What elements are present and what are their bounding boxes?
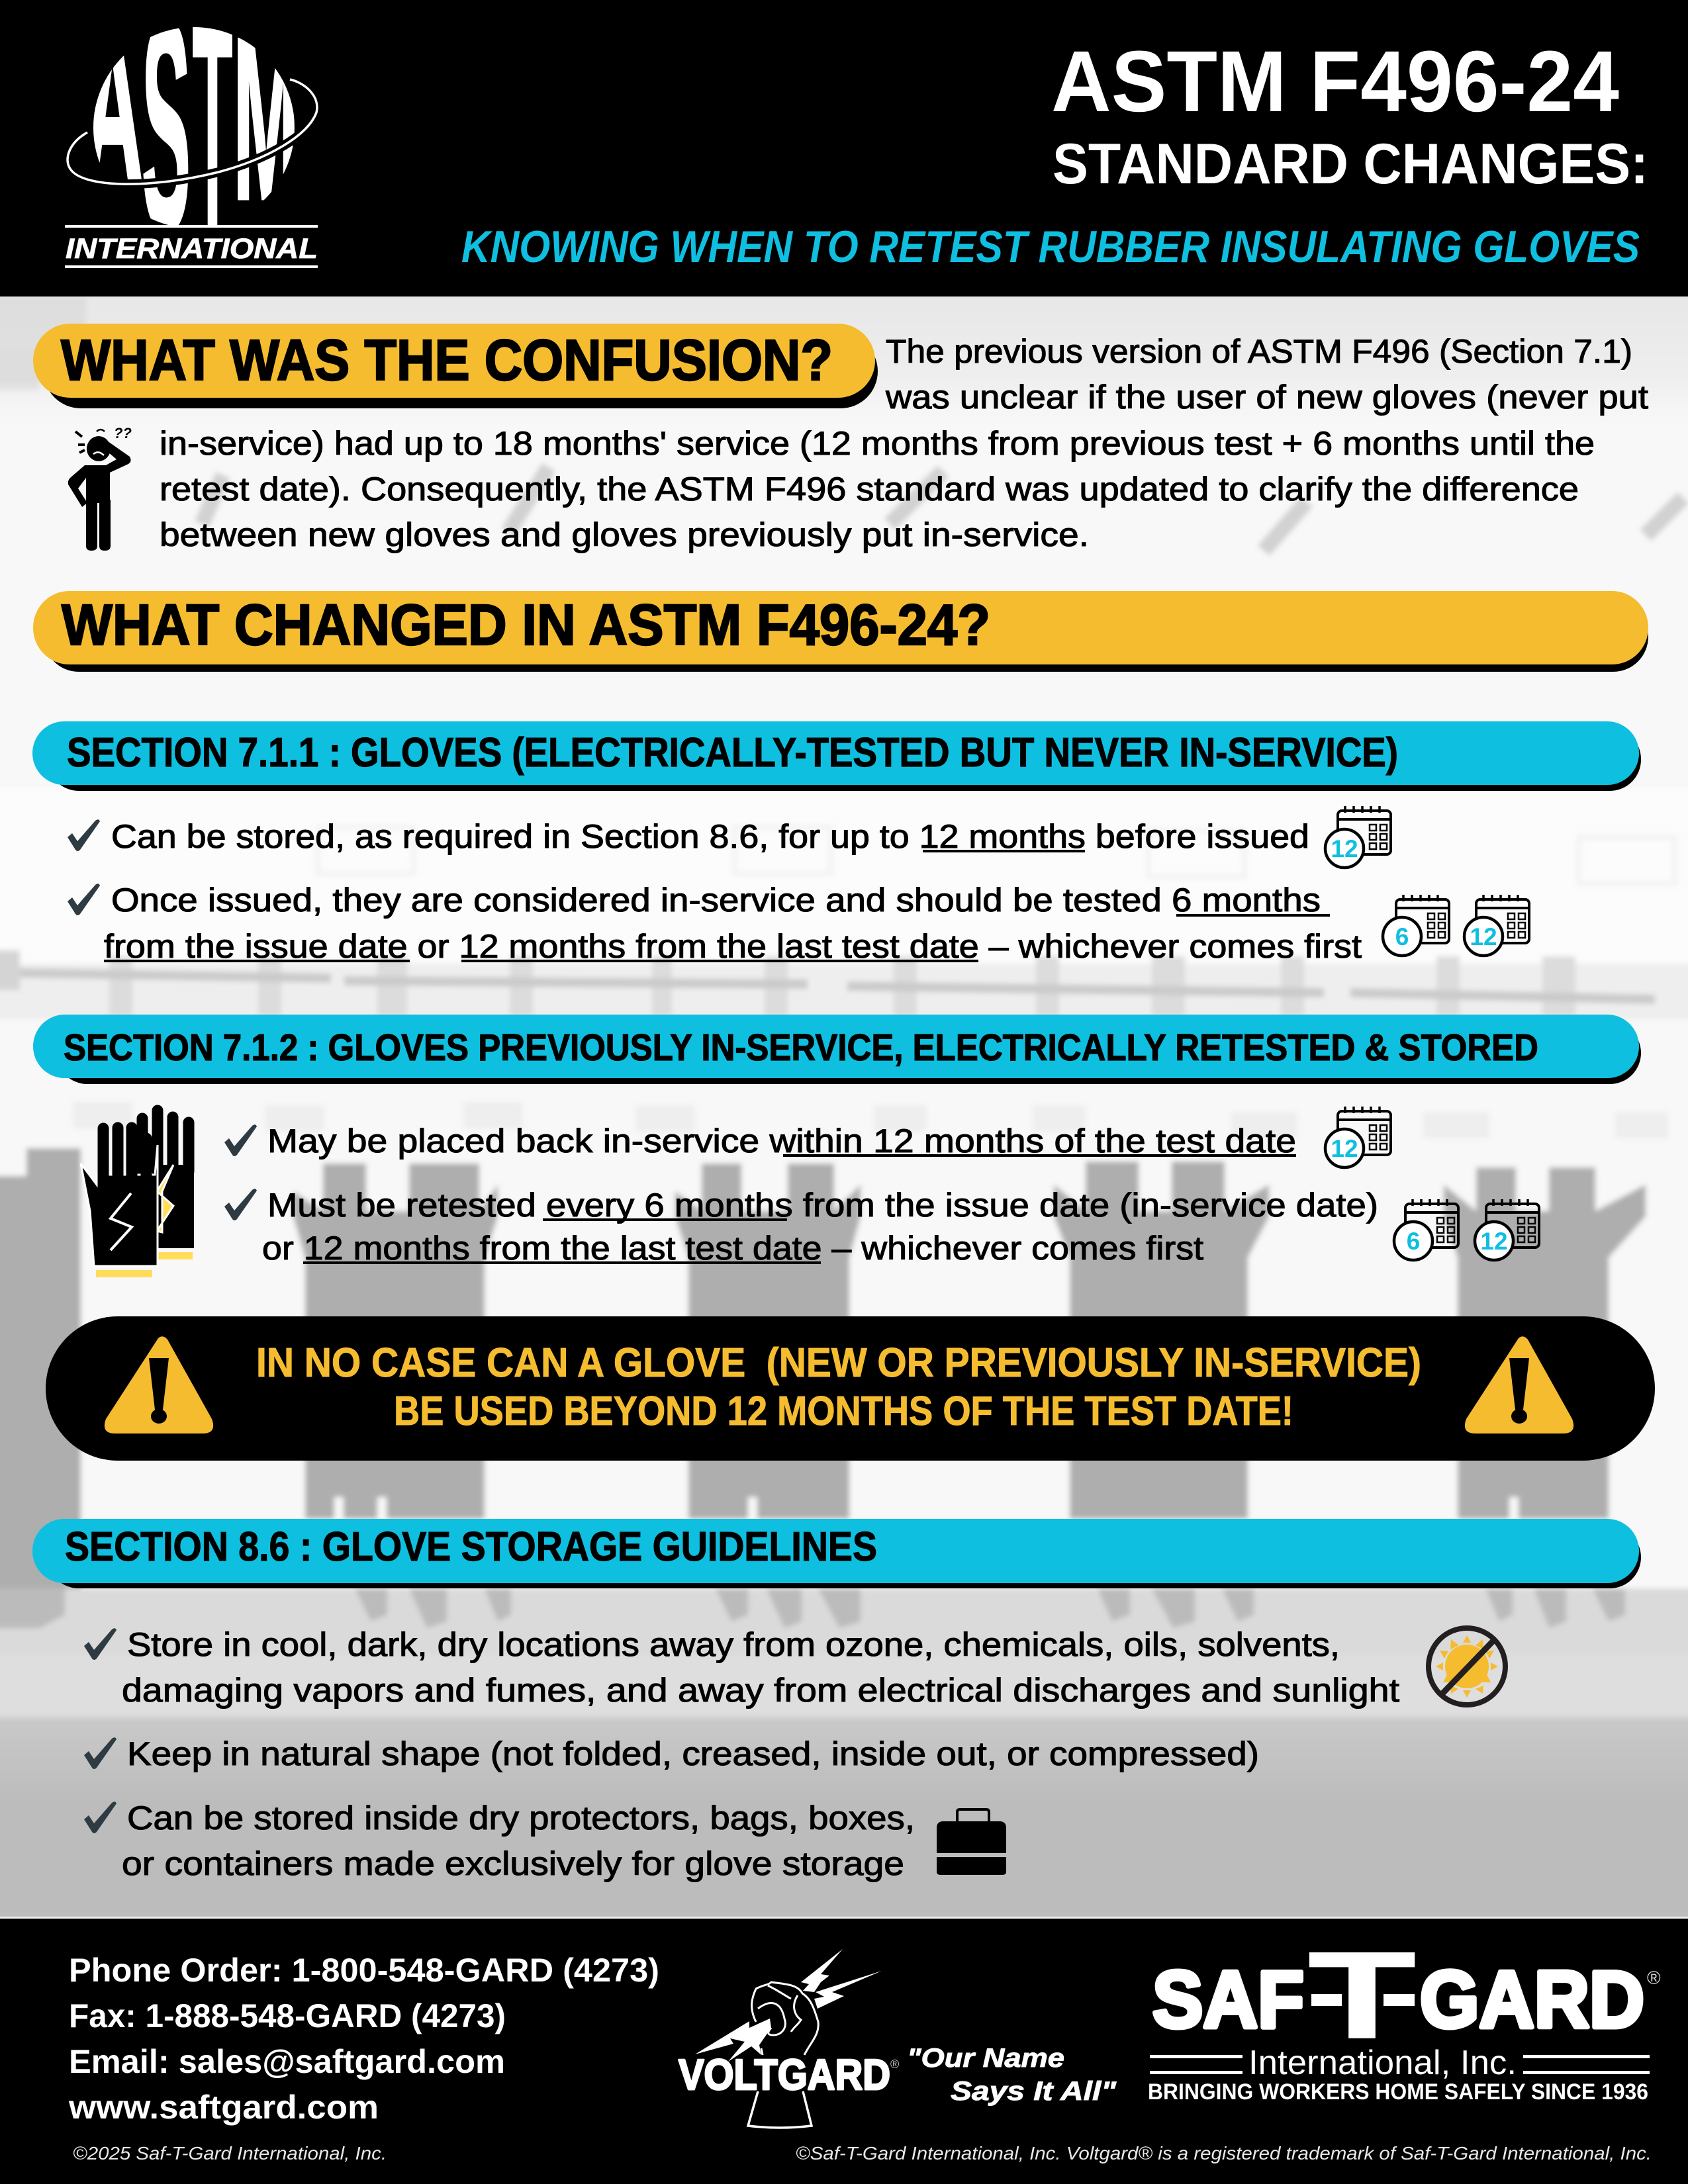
callout text: IN NO CASE CAN A GLOVE (NEW OR PREVIOUSLY IN-SERVICE) (256, 1340, 1421, 1386)
icon: calendar 12 months: 12 (1470, 923, 1497, 950)
section header 8.6 (32, 1519, 1641, 1588)
contact details: Phone Order: 1-800-548-GARD (4273) (69, 1952, 659, 1989)
trademark notice: ©Saf-T-Gard International, Inc. Voltgard® is a registered trademark of Saf-T-Gard International, Inc. (796, 2143, 1652, 2163)
bullet: natural shape: Keep in natural shape (not folded, creased, inside out, or compressed) (127, 1735, 1259, 1772)
text block: confusion explanation: between new gloves and gloves previously put in-service. (160, 516, 1089, 553)
slogan: "Our Name (907, 2044, 1064, 2073)
slogan: Says It All" (951, 2077, 1117, 2106)
icon: calendar 6 months: 6 (1395, 923, 1409, 950)
bullet: once issued (68, 882, 1362, 965)
section header 7.1.2: SECTION 7.1.2 : GLOVES PREVIOUSLY IN-SERVICE, ELECTRICALLY RETESTED & STORED (64, 1026, 1538, 1069)
text block: confusion explanation (160, 333, 1648, 553)
footer band (0, 1917, 1688, 2184)
bullet: storage location: damaging vapors and fumes, and away from electrical discharges and sunlight (122, 1672, 1399, 1709)
text block: confusion explanation: was unclear if the user of new gloves (never put (885, 379, 1648, 416)
icon: confused person (68, 425, 132, 551)
bullet: containers: Can be stored inside dry protectors, bags, boxes, (127, 1799, 915, 1837)
contact details: Email: sales@saftgard.com (69, 2043, 505, 2080)
icon: warning triangle left (105, 1336, 213, 1433)
bullet: once issued: from the issue date or 12 months from the last test date – whichever comes first (104, 928, 1362, 965)
bullet: must be retested (224, 1187, 1378, 1267)
logo: Voltgard fist with lightning: VOLTGARD (679, 2050, 890, 2099)
icon: calendar 12 months (1325, 1107, 1391, 1167)
bullet: must be retested: or 12 months from the last test date – whichever comes first (262, 1230, 1203, 1267)
icon: calendar 12 months (1464, 895, 1529, 956)
contact details: www.saftgard.com (68, 2089, 379, 2126)
icon: warning triangle right (1465, 1336, 1573, 1433)
slogan (907, 2044, 1117, 2106)
text block: confusion explanation: The previous version of ASTM F496 (Section 7.1) (886, 333, 1632, 370)
icon: briefcase (937, 1809, 1006, 1875)
icon: confused person: ?? (114, 425, 132, 441)
subtitle: STANDARD CHANGES: (1053, 132, 1648, 196)
bullet: back in service: May be placed back in-service within 12 months of the test date (267, 1122, 1296, 1160)
bullet: storage location (84, 1626, 1399, 1709)
logo: Saf-T-Gard International: International, Inc. (1248, 2044, 1517, 2082)
icon: no sunlight (1429, 1628, 1505, 1705)
bullet: once issued: Once issued, they are considered in-service and should be tested 6 months (111, 882, 1321, 919)
heading: what was the confusion: WHAT WAS THE CONFUSION? (61, 328, 833, 392)
bullet: stored up to 12 months: Can be stored, as required in Section 8.6, for up to 12 months before issued (111, 818, 1309, 855)
logo: Saf-T-Gard International: ® (1647, 1968, 1661, 1988)
icon: calendar 6 months (1383, 895, 1449, 956)
icon: calendar 12 months: 12 (1331, 1135, 1358, 1162)
logo: ASTM International (65, 27, 318, 268)
logo: Voltgard fist with lightning: ® (890, 2058, 899, 2071)
icon: insulating gloves (81, 1111, 194, 1277)
icon: calendar 6 months (1394, 1199, 1458, 1260)
icon: calendar 12 months (1475, 1199, 1539, 1260)
page background: blurred photo of gloves on a rack (0, 265, 1688, 1959)
section header 8.6: SECTION 8.6 : GLOVE STORAGE GUIDELINES (65, 1524, 877, 1570)
section header 7.1.1: SECTION 7.1.1 : GLOVES (ELECTRICALLY-TESTED BUT NEVER IN-SERVICE) (67, 730, 1398, 776)
logo: Saf-T-Gard International: GARD (1420, 1954, 1644, 2044)
bullet: containers: or containers made exclusively for glove storage (122, 1845, 904, 1882)
logo: Voltgard fist with lightning (679, 1949, 899, 2128)
section header 7.1.2 (33, 1015, 1641, 1084)
logo: Saf-T-Gard International: T (1308, 1927, 1416, 2064)
logo: ASTM International: INTERNATIONAL (66, 233, 318, 265)
section header 7.1.1 (32, 721, 1641, 791)
heading: what changed: WHAT CHANGED IN ASTM F496-24? (62, 593, 990, 657)
bullet: must be retested: Must be retested every 6 months from the issue date (in-service date) (267, 1187, 1378, 1224)
logo: Saf-T-Gard International (1148, 1927, 1661, 2105)
contact details (68, 1952, 659, 2126)
logo: Saf-T-Gard International: BRINGING WORKERS HOME SAFELY SINCE 1936 (1148, 2079, 1648, 2105)
logo: Saf-T-Gard International: SAF (1152, 1954, 1304, 2044)
callout text: BE USED BEYOND 12 MONTHS OF THE TEST DATE! (394, 1388, 1293, 1434)
copyright left: ©2025 Saf-T-Gard International, Inc. (73, 2143, 387, 2163)
header band (0, 0, 1688, 296)
contact details: Fax: 1-888-548-GARD (4273) (69, 1997, 506, 2034)
icon: calendar 12 months: 12 (1331, 835, 1358, 862)
bullet: storage location: Store in cool, dark, dry locations away from ozone, chemicals, oils, solvents, (127, 1626, 1340, 1663)
callout: 12 month limit warning (46, 1316, 1655, 1461)
heading: what changed (33, 591, 1648, 672)
icon: calendar 6 months: 6 (1407, 1228, 1420, 1255)
callout text (256, 1340, 1421, 1434)
bullet: containers (84, 1799, 915, 1882)
text block: confusion explanation: in-service) had up to 18 months' service (12 months from previous test + 6 months until the (160, 425, 1595, 462)
text block: confusion explanation: retest date). Consequently, the ASTM F496 standard was updated to clarify the difference (160, 471, 1579, 508)
icon: calendar 12 months (1325, 806, 1391, 868)
icon: calendar 12 months: 12 (1480, 1228, 1508, 1255)
title: ASTM F496-24 (1051, 32, 1619, 130)
